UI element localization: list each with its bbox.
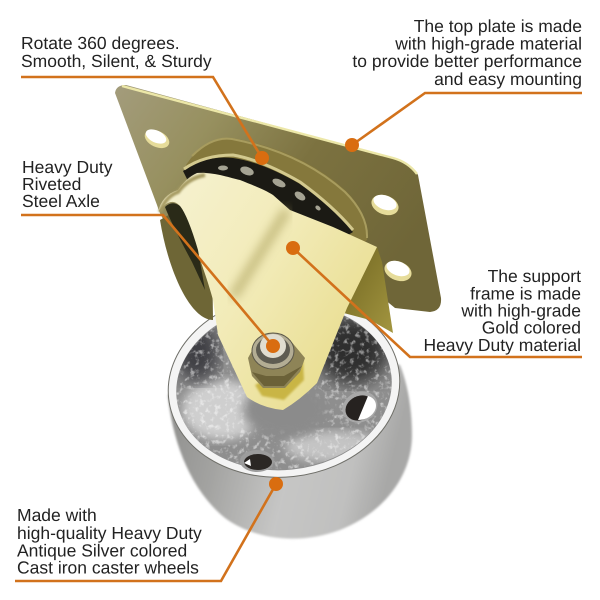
text: axle: Riveted xyxy=(22,174,81,194)
hex nut xyxy=(248,340,305,388)
caster wheel xyxy=(166,314,414,540)
text: axle: Steel Axle xyxy=(22,191,100,211)
leader: support frame xyxy=(293,248,582,357)
bearing inner ring xyxy=(184,155,353,230)
nut shadow on frame xyxy=(255,360,304,400)
text: wheel: Made with xyxy=(17,505,97,525)
top plate xyxy=(115,85,441,312)
leader lines xyxy=(15,77,582,581)
dot: support frame xyxy=(286,241,300,255)
wheel hole left xyxy=(240,450,274,472)
text: wheel: Antique Silver colored xyxy=(17,540,187,560)
text: top plate: to provide better performance xyxy=(352,51,582,71)
frame lug edge xyxy=(160,175,205,212)
wheel rim xyxy=(159,283,409,489)
text: rotation: Smooth, Silent, & Sturdy xyxy=(21,51,212,71)
nut face xyxy=(252,366,302,386)
text: top plate: and easy mounting xyxy=(434,69,582,89)
back fold of support frame xyxy=(340,247,393,333)
leader: wheel xyxy=(15,484,276,581)
axle hole xyxy=(165,203,205,290)
text: wheel: Cast iron caster wheels xyxy=(17,558,199,578)
washer xyxy=(252,333,294,369)
left lug shadow of frame xyxy=(160,205,213,320)
wheel interior xyxy=(168,293,400,481)
plate top edge highlight xyxy=(122,86,417,174)
text: top plate: with high-grade material xyxy=(394,34,582,54)
text: axle: Heavy Duty xyxy=(22,157,112,177)
wheel cast texture xyxy=(176,316,392,470)
leader: top plate xyxy=(352,93,582,145)
text: support frame: frame is made xyxy=(470,284,581,304)
axle nut and bolt xyxy=(248,333,305,400)
bearing balls xyxy=(218,165,322,211)
text: top plate: The top plate is made xyxy=(414,16,582,36)
text: support frame: The support xyxy=(488,266,581,286)
support frame xyxy=(158,173,377,410)
leader: rotation xyxy=(21,77,262,158)
text: wheel: high-quality Heavy Duty xyxy=(17,523,202,543)
dot: rotation xyxy=(255,151,269,165)
wheel hole right xyxy=(337,386,383,428)
bearing dark channel xyxy=(183,158,353,240)
plate hole right upper xyxy=(369,191,401,219)
dot: top plate xyxy=(345,138,359,152)
bolt end xyxy=(260,334,286,358)
plate hole top left xyxy=(142,126,172,152)
frame crease shadow xyxy=(233,210,287,297)
text: support frame: with high-grade xyxy=(460,300,581,320)
bearing assembly xyxy=(183,138,367,300)
bearing outer race xyxy=(186,138,367,300)
leader: axle xyxy=(21,215,273,346)
dot: wheel xyxy=(269,477,283,491)
text: rotation: Rotate 360 degrees. xyxy=(21,33,180,53)
wheel outer body xyxy=(168,340,412,539)
text: support frame: Heavy Duty material xyxy=(423,335,581,355)
plate hole right lower xyxy=(382,257,414,285)
text: support frame: Gold colored xyxy=(482,318,581,338)
dot: axle xyxy=(266,339,280,353)
